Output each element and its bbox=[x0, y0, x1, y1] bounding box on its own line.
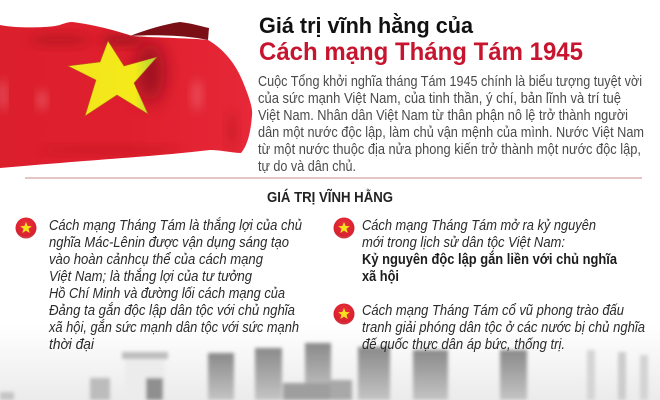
text block: right item one: xã hội bbox=[362, 268, 399, 285]
icon: flag badge left bbox=[16, 218, 36, 238]
text block: right item one: Cách mạng Tháng Tám mở ra kỷ nguyên bbox=[362, 217, 596, 234]
title bbox=[259, 13, 583, 66]
icon: flag badge right bottom bbox=[334, 304, 354, 324]
text block: left item: Đảng ta gắn độc lập dân tộc với chủ nghĩa bbox=[49, 302, 295, 319]
text block: left item: nghĩa Mác-Lênin được vận dụng sáng tạo bbox=[49, 234, 289, 251]
panel: left value item bbox=[16, 217, 303, 353]
icon: waving red flag with yellow star bbox=[0, 18, 256, 170]
text block: right item one bbox=[362, 217, 618, 285]
intro paragraph: tự do và dân chủ. bbox=[258, 158, 356, 175]
text block: left item bbox=[48, 217, 303, 353]
title: Giá trị vĩnh hằng của bbox=[259, 13, 474, 38]
intro paragraph bbox=[258, 73, 644, 175]
background: faded building photograph bbox=[0, 325, 660, 400]
icon: flag badge right top bbox=[334, 218, 354, 238]
text block: left item: Hồ Chí Minh và đường lối cách mạng của bbox=[49, 285, 285, 302]
panel: right value item one bbox=[334, 217, 618, 285]
panel: right value item two bbox=[334, 302, 645, 353]
icon: star on flag bbox=[68, 41, 157, 116]
text block: left item: Cách mạng Tháng Tám là thắng lợi của chủ bbox=[49, 217, 303, 234]
text block: left item: thời đại bbox=[49, 336, 95, 353]
text block: right item two bbox=[362, 302, 645, 353]
title: Cách mạng Tháng Tám 1945 bbox=[259, 38, 583, 66]
text block: right item two: Cách mạng Tháng Tám cổ vũ phong trào đấu bbox=[362, 302, 625, 319]
section heading: GIÁ TRỊ VĨNH HẰNG bbox=[267, 188, 393, 206]
text block: right item two: đế quốc thực dân áp bức, thống trị. bbox=[362, 336, 565, 353]
text block: right item one: mới trong lịch sử dân tộc Việt Nam: bbox=[362, 234, 565, 251]
text block: left item: xã hội, gắn sức mạnh dân tộc với sức mạnh bbox=[48, 319, 299, 336]
text block: left item: vào hoàn cảnhcụ thể của cách mạng bbox=[49, 251, 264, 268]
text block: right item one: Kỷ nguyên độc lập gắn liền với chủ nghĩa bbox=[362, 250, 618, 268]
text block: left item: Việt Nam; là thắng lợi của tư tưởng bbox=[49, 268, 253, 285]
